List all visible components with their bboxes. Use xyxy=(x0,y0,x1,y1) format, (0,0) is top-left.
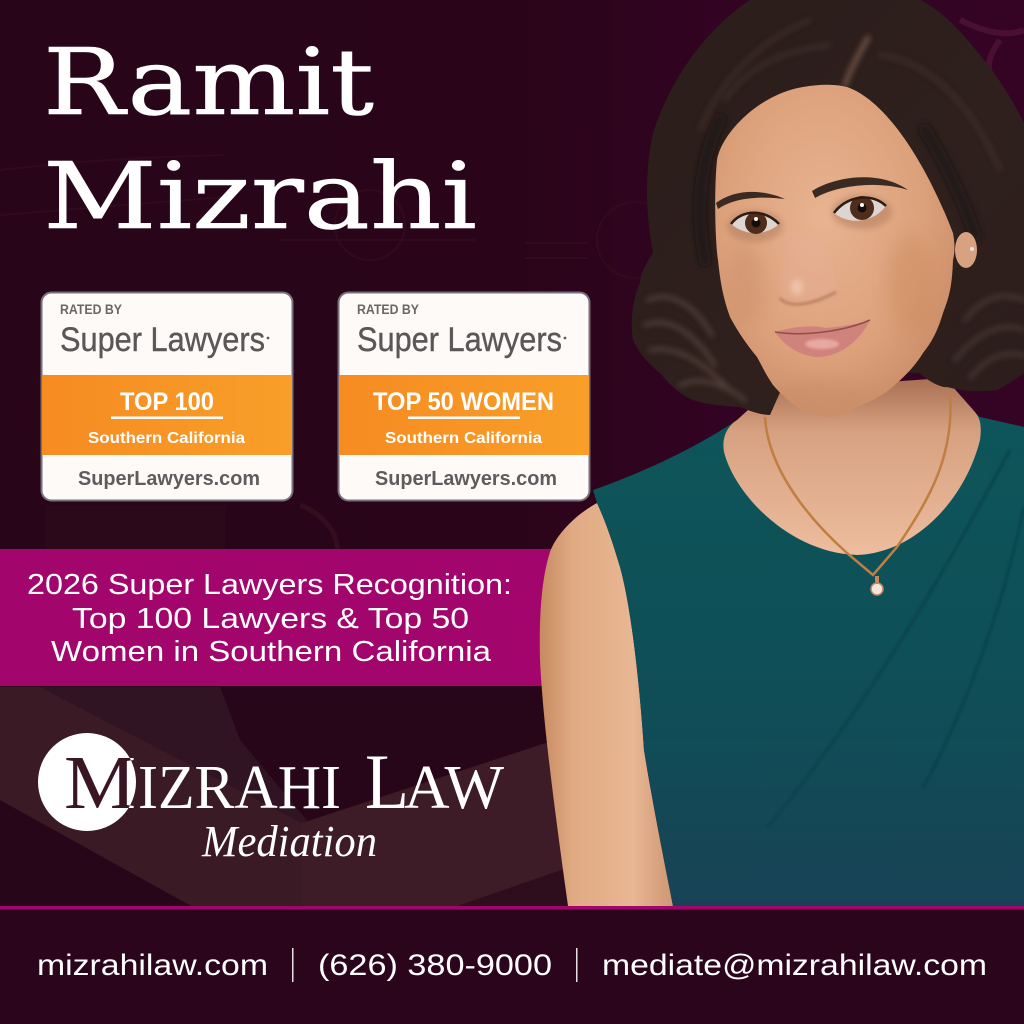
badge: Top 100: Super Lawyers xyxy=(60,321,265,359)
badge: Top 50 Women: RATED BY xyxy=(357,302,419,317)
portrait: arm xyxy=(540,503,673,906)
banner: 2026 Super Lawyers Recognition: xyxy=(27,569,512,601)
badge: Top 50 Women: SuperLawyers.com xyxy=(375,468,557,490)
portrait: lips xyxy=(775,320,870,357)
logo: AW xyxy=(404,754,504,822)
portrait: ear xyxy=(955,232,977,268)
portrait: eyes xyxy=(727,195,892,242)
title: Mizrahi xyxy=(43,143,477,250)
portrait photo xyxy=(540,0,1024,906)
portrait: brows xyxy=(716,177,908,209)
badge: Top 50 Women: TOP 50 WOMEN xyxy=(373,388,554,416)
portrait: dress xyxy=(593,395,1024,906)
badge: Top 100 xyxy=(42,292,292,500)
portrait: dress folds xyxy=(767,450,1024,828)
logo: L xyxy=(365,738,409,825)
portrait: hair strands xyxy=(645,20,1024,400)
badge: Top 50 Women xyxy=(338,292,590,500)
badge: Top 100: SuperLawyers.com xyxy=(78,468,260,490)
title: Ramit xyxy=(43,29,374,136)
portrait: necklace xyxy=(765,393,951,595)
portrait: neck and chest xyxy=(723,378,981,555)
banner: Top 100 Lawyers & Top 50 xyxy=(72,603,469,635)
logo: M xyxy=(64,741,136,825)
title xyxy=(43,29,477,250)
portrait: face shading xyxy=(733,238,932,328)
banner: Women in Southern California xyxy=(51,636,492,668)
badge: Top 100: Southern California xyxy=(88,430,245,447)
logo xyxy=(38,733,504,866)
portrait: hair xyxy=(632,0,1024,415)
badge: Top 100: TOP 100 xyxy=(120,388,214,416)
logo: M xyxy=(64,741,136,825)
footer xyxy=(0,906,1024,1024)
badge: Top 50 Women: Southern California xyxy=(385,430,542,447)
badge: Top 50 Women: Super Lawyers xyxy=(357,321,562,359)
badge: Top 100: RATED BY xyxy=(60,302,122,317)
portrait: face xyxy=(715,85,954,417)
logo: IZRAHI xyxy=(138,754,341,822)
footer: (626) 380-9000 xyxy=(318,949,552,982)
banner xyxy=(0,549,570,686)
portrait: earring xyxy=(970,247,974,251)
footer: mediate@mizrahilaw.com xyxy=(602,949,987,982)
footer: mizrahilaw.com xyxy=(37,949,268,982)
logo: Mediation xyxy=(201,817,377,866)
